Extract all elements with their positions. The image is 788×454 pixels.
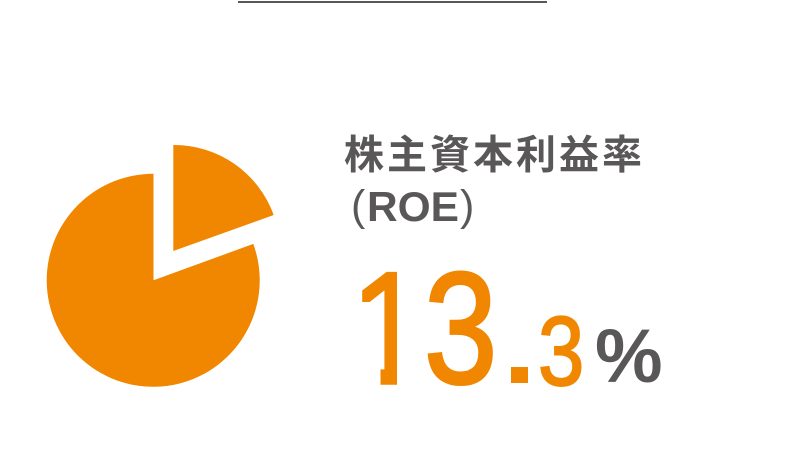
percent sign: % — [595, 314, 663, 399]
pie chart icon — [47, 145, 274, 387]
pie detached slice — [173, 145, 274, 251]
top rule — [238, 1, 547, 3]
pie main body — [47, 174, 260, 387]
heading line 1: 株主資本利益率 — [344, 134, 645, 178]
opening parenthesis: ( — [351, 182, 366, 230]
value digit 1: 1 — [350, 240, 430, 418]
heading line 2 — [351, 182, 474, 230]
decimal point — [511, 367, 528, 383]
ROE: ROE — [367, 183, 459, 230]
value digit 3: 3 — [424, 239, 497, 417]
heading: metric name — [344, 134, 645, 230]
value decimal digit: 3 — [538, 298, 584, 407]
closing parenthesis: ) — [460, 182, 474, 230]
value: 13.3% — [362, 270, 661, 387]
